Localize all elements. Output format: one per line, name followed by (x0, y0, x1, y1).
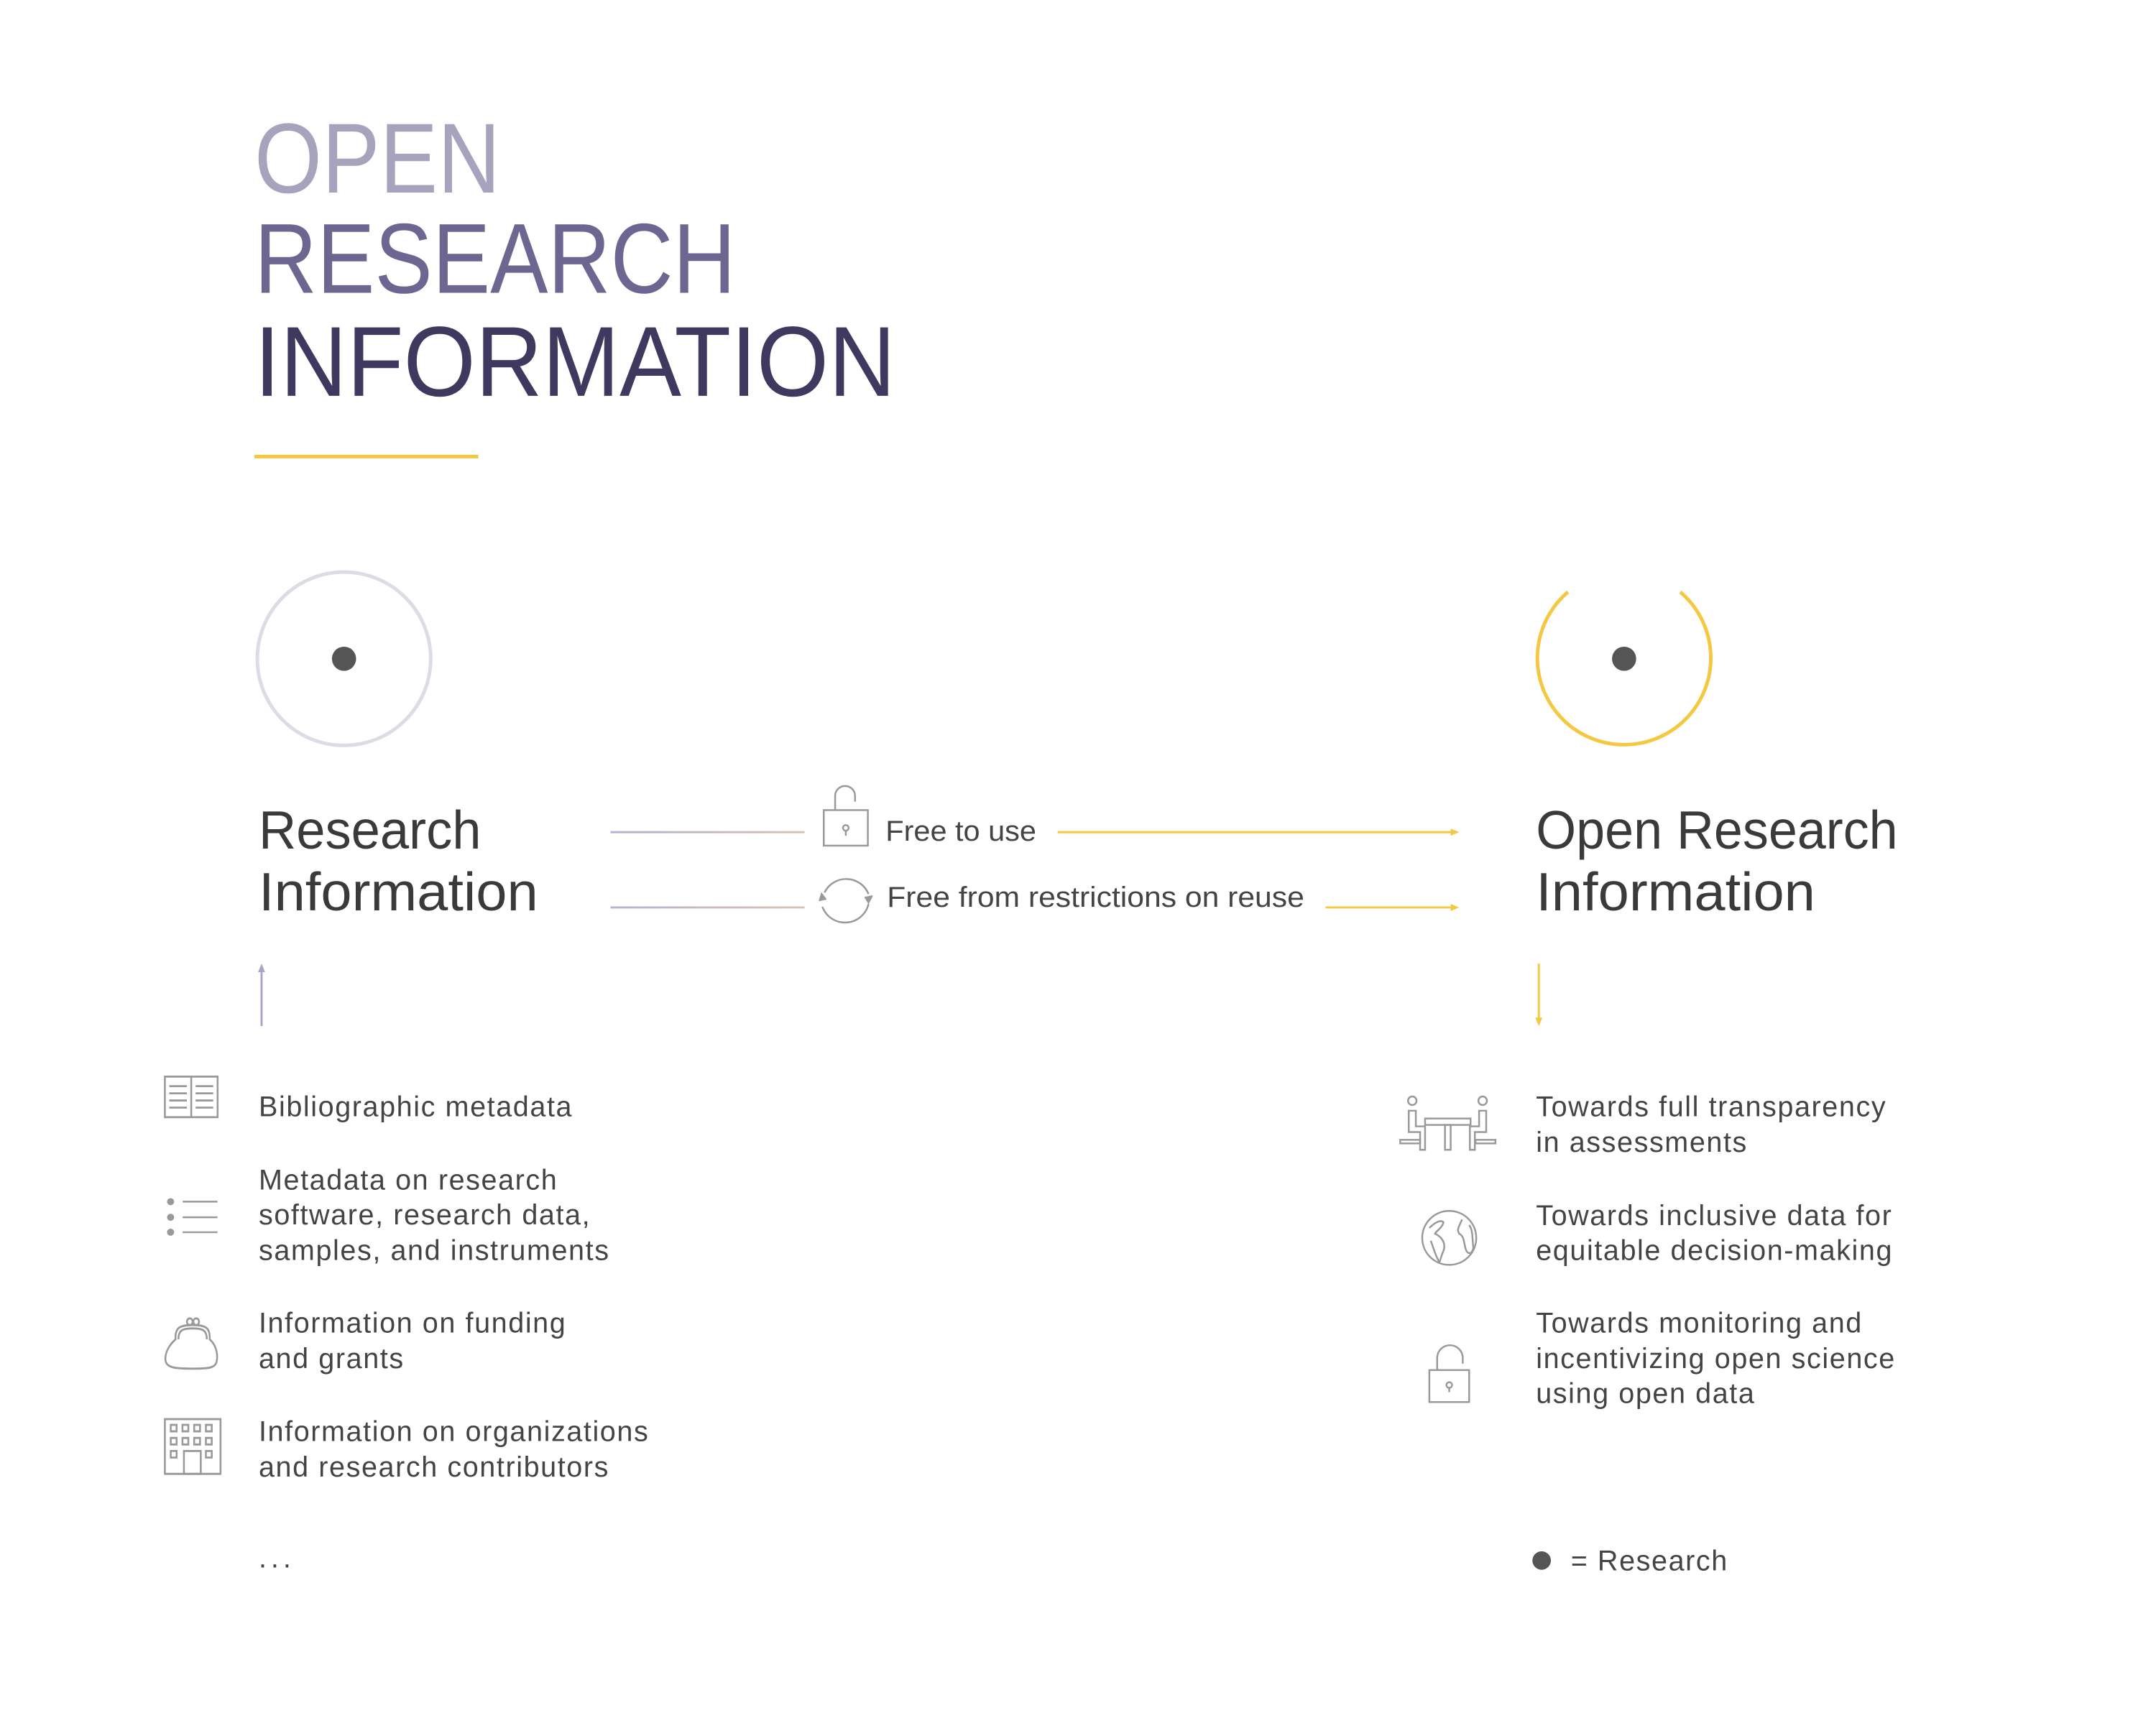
title: OPEN (254, 103, 500, 214)
arrow: up (258, 964, 265, 1026)
item: metadata on research: software, research data, (259, 1199, 591, 1231)
arrow: free from restrictions (1325, 904, 1459, 911)
icon: open lock (1429, 1345, 1469, 1402)
heading: open research information: Information (1536, 862, 1815, 922)
heading: research information (259, 800, 538, 922)
icon: building (165, 1419, 221, 1474)
item: metadata on research: samples, and instruments (259, 1234, 610, 1266)
heading: open research information (1536, 800, 1898, 922)
icon: meeting table (1400, 1096, 1496, 1150)
item: funding: and grants (259, 1343, 405, 1375)
item: organizations: and research contributors (259, 1451, 609, 1483)
text: free from restrictions: Free from restrictions on reuse (887, 882, 1304, 913)
item: ellipsis: ... (259, 1543, 295, 1574)
arrow: down (1535, 964, 1542, 1026)
title: INFORMATION (254, 307, 895, 417)
icon: open research circle (1537, 592, 1711, 744)
heading: open research information: Open Research (1536, 800, 1898, 860)
item: organizations: Information on organizations (259, 1416, 649, 1448)
arrow: free to use (1058, 828, 1459, 836)
list: open research outcomes (1400, 1091, 1896, 1409)
title underline (254, 455, 479, 458)
icon: open lock (824, 786, 868, 846)
heading: research information: Research (259, 800, 482, 860)
icon: cycle (819, 879, 872, 923)
item: bibliographic: Bibliographic metadata (259, 1091, 573, 1123)
item: transparency: Towards full transparency (1536, 1091, 1886, 1123)
icon: list (167, 1198, 218, 1236)
icon: purse (165, 1318, 217, 1369)
heading: research information: Information (259, 862, 538, 922)
connector lines left (611, 832, 805, 908)
icon: research circle (257, 572, 430, 745)
item: metadata on research: Metadata on research (259, 1165, 558, 1196)
item: monitoring: using open data (1536, 1377, 1755, 1409)
list: research information types (165, 1076, 649, 1574)
item: monitoring: incentivizing open science (1536, 1343, 1896, 1375)
item: monitoring: Towards monitoring and (1536, 1307, 1863, 1339)
item: transparency: in assessments (1536, 1127, 1748, 1158)
item: inclusive data: Towards inclusive data for (1536, 1200, 1892, 1232)
title: RESEARCH (254, 203, 736, 314)
item: inclusive data: equitable decision-making (1536, 1234, 1893, 1266)
legend: = Research (1571, 1546, 1728, 1577)
icon: globe (1422, 1211, 1476, 1265)
item: funding: Information on funding (259, 1307, 566, 1339)
icon: book (165, 1076, 218, 1117)
text: free to use: Free to use (885, 816, 1036, 847)
title (254, 103, 895, 417)
